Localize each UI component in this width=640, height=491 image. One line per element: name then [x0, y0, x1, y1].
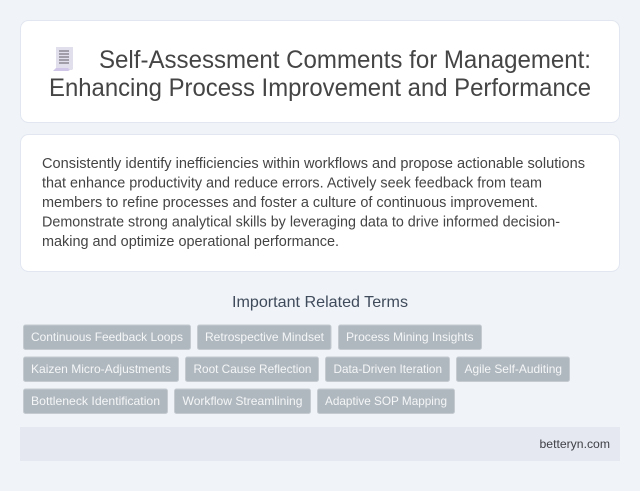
tag [24, 325, 190, 350]
tag: Data-Driven Iteration [334, 362, 442, 376]
tag: Process Mining Insights [346, 330, 474, 344]
tag: Retrospective Mindset [205, 330, 325, 344]
tag group: related terms [24, 325, 570, 414]
summary paragraph: Consistently identify inefficiencies within workflows and propose actionable solutions [42, 156, 585, 172]
tag [338, 325, 482, 350]
tag: Kaizen Micro-Adjustments [31, 362, 171, 376]
tag [174, 389, 310, 414]
tag [326, 357, 450, 382]
title: Self-Assessment Comments for Management: [99, 46, 591, 74]
tag: Adaptive SOP Mapping [325, 394, 447, 408]
tag [24, 389, 168, 414]
tag [24, 357, 178, 382]
title: Enhancing Process Improvement and Performance [49, 74, 591, 102]
tag: Root Cause Reflection [194, 362, 312, 376]
tag [456, 357, 570, 382]
title [49, 46, 591, 102]
footer bar [20, 427, 620, 461]
footer credit: betteryn.com [540, 437, 610, 451]
summary paragraph [42, 156, 585, 250]
tag: Agile Self-Auditing [464, 362, 562, 376]
tag [318, 389, 454, 414]
summary paragraph: Demonstrate strong analytical skills by leveraging data to drive informed decision- [42, 214, 560, 230]
tag: Bottleneck Identification [31, 394, 160, 408]
tag: Workflow Streamlining [182, 394, 302, 408]
icon: document scroll [53, 47, 73, 71]
heading: important related terms: Important Related Terms [232, 294, 408, 311]
panel: title card [20, 20, 620, 122]
tag [198, 325, 331, 350]
summary paragraph: making and optimize operational performance. [42, 234, 339, 250]
panel: summary text [20, 134, 620, 272]
tag: Continuous Feedback Loops [31, 330, 183, 344]
summary paragraph: members to refine processes and foster a culture of continuous improvement. [42, 195, 538, 211]
tag [186, 357, 318, 382]
summary paragraph: that enhance productivity and reduce errors. Actively seek feedback from team [42, 176, 542, 192]
